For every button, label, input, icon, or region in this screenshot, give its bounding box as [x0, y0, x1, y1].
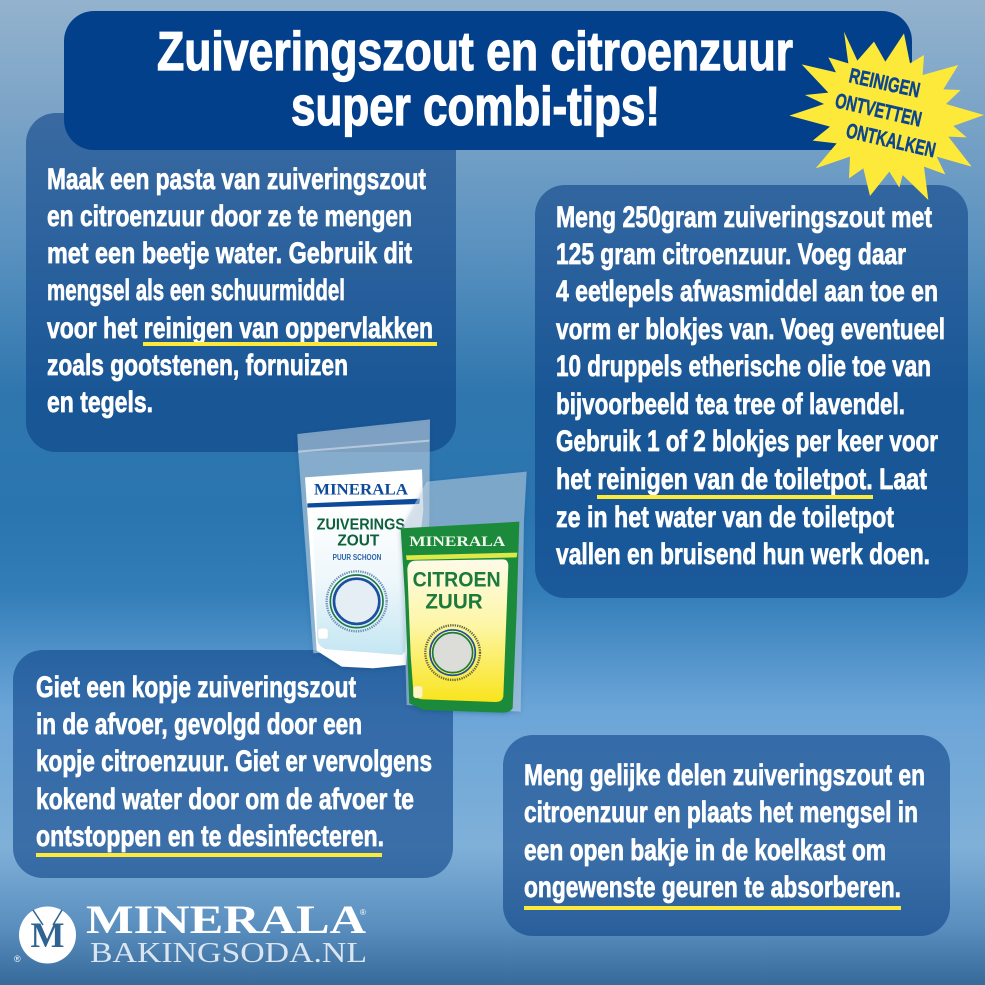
panel: pasta tip: voor het reinigen van oppervlakken: [47, 312, 433, 345]
panel: pasta tip: Maak een pasta van zuiveringszout: [47, 163, 426, 196]
panel: pasta tip: [26, 113, 456, 452]
panel: pasta tip: zoals gootstenen, fornuizen: [47, 349, 348, 382]
panel: fridge tip: [503, 735, 950, 936]
panel: pasta tip: mengsel als een schuurmiddel: [47, 274, 345, 307]
product: zuiveringszout pouch: ZOUT: [337, 532, 380, 549]
panel: pasta tip: en citroenzuur door ze te mengen: [47, 200, 412, 233]
product: zuiveringszout pouch: [297, 419, 430, 668]
panel: drain tip: in de afvoer, gevolgd door een: [36, 708, 362, 741]
logo: Minerala bakingsoda.nl: ®: [14, 954, 21, 964]
starburst badge: [789, 32, 984, 200]
title banner: [64, 11, 912, 150]
starburst badge: REINIGEN: [847, 64, 922, 102]
panel: toilet blocks tip: ze in het water van de toiletpot: [556, 501, 894, 534]
logo: Minerala bakingsoda.nl: ®: [360, 908, 366, 917]
panel: fridge tip: een open bakje in de koelkast om: [524, 834, 886, 867]
panel: drain tip: [13, 650, 453, 878]
product: citroenzuur pouch: MINERALA: [409, 534, 506, 550]
panel: drain tip: Giet een kopje zuiveringszout: [36, 671, 356, 704]
panel: toilet blocks tip: [535, 185, 968, 598]
title banner: Zuiveringszout en citroenzuur: [157, 20, 793, 82]
product: zuiveringszout pouch: MINERALA: [314, 482, 408, 499]
title banner: super combi-tips!: [291, 75, 660, 137]
product: citroenzuur pouch: [401, 472, 527, 713]
panel: drain tip: ontstoppen en te desinfecteren.: [36, 820, 384, 853]
product: zuiveringszout pouch: ZUIVERINGS: [317, 516, 405, 533]
panel: pasta tip: en tegels.: [47, 386, 153, 419]
starburst badge: ONTVETTEN: [833, 89, 924, 132]
panel: drain tip: kopje citroenzuur. Giet er vervolgens: [36, 745, 432, 778]
starburst badge: ONTKALKEN: [844, 119, 938, 162]
panel: pasta tip: met een beetje water. Gebruik dit: [47, 237, 412, 270]
logo: Minerala bakingsoda.nl: BAKINGSODA.NL: [90, 938, 367, 969]
product: zuiveringszout pouch: PUUR SCHOON: [333, 553, 382, 562]
product: citroenzuur pouch: CITROEN: [413, 568, 501, 592]
logo: Minerala bakingsoda.nl: [14, 897, 367, 969]
logo: Minerala bakingsoda.nl: MINERALA: [86, 897, 366, 942]
product: citroenzuur pouch: ZUUR: [425, 590, 483, 614]
panel: drain tip: kokend water door om de afvoer te: [36, 783, 414, 816]
logo: Minerala bakingsoda.nl: M: [31, 915, 64, 955]
